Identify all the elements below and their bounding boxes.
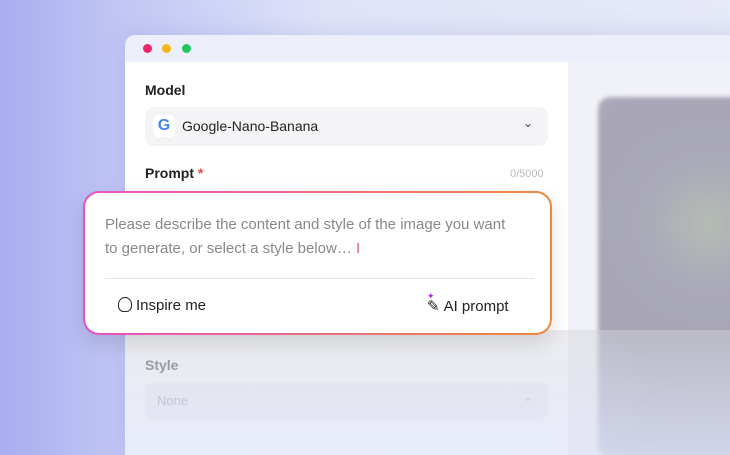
model select: Google-Nano-Banana xyxy=(182,118,318,134)
preview image blurred xyxy=(598,97,730,455)
model label: Model xyxy=(145,82,185,98)
left form panel xyxy=(125,62,568,455)
counter: 0/5000 xyxy=(510,168,544,180)
ai prompt button: ✎ AI prompt xyxy=(427,298,509,315)
placeholder text: to generate, or select a style below… I xyxy=(105,240,360,257)
style select: None xyxy=(157,393,188,408)
prompt label: Prompt * xyxy=(145,165,203,181)
prompt card xyxy=(83,191,552,335)
window controls xyxy=(143,44,191,53)
style label: Style xyxy=(145,357,178,373)
icon: google G xyxy=(153,115,175,137)
model select xyxy=(145,107,548,146)
app window xyxy=(125,35,730,455)
model select: ⌄ xyxy=(523,116,533,130)
placeholder text: Please describe the content and style of the image you want xyxy=(105,216,505,233)
right panel bg xyxy=(568,62,730,455)
prompt card: ✦ xyxy=(427,291,435,301)
icon: google G: G xyxy=(158,117,170,134)
style select xyxy=(145,382,548,420)
bottom fade overlay xyxy=(125,330,730,455)
placeholder text xyxy=(105,216,506,257)
style select: ⌄ xyxy=(523,390,533,404)
inspire me button: Inspire me xyxy=(136,297,206,314)
